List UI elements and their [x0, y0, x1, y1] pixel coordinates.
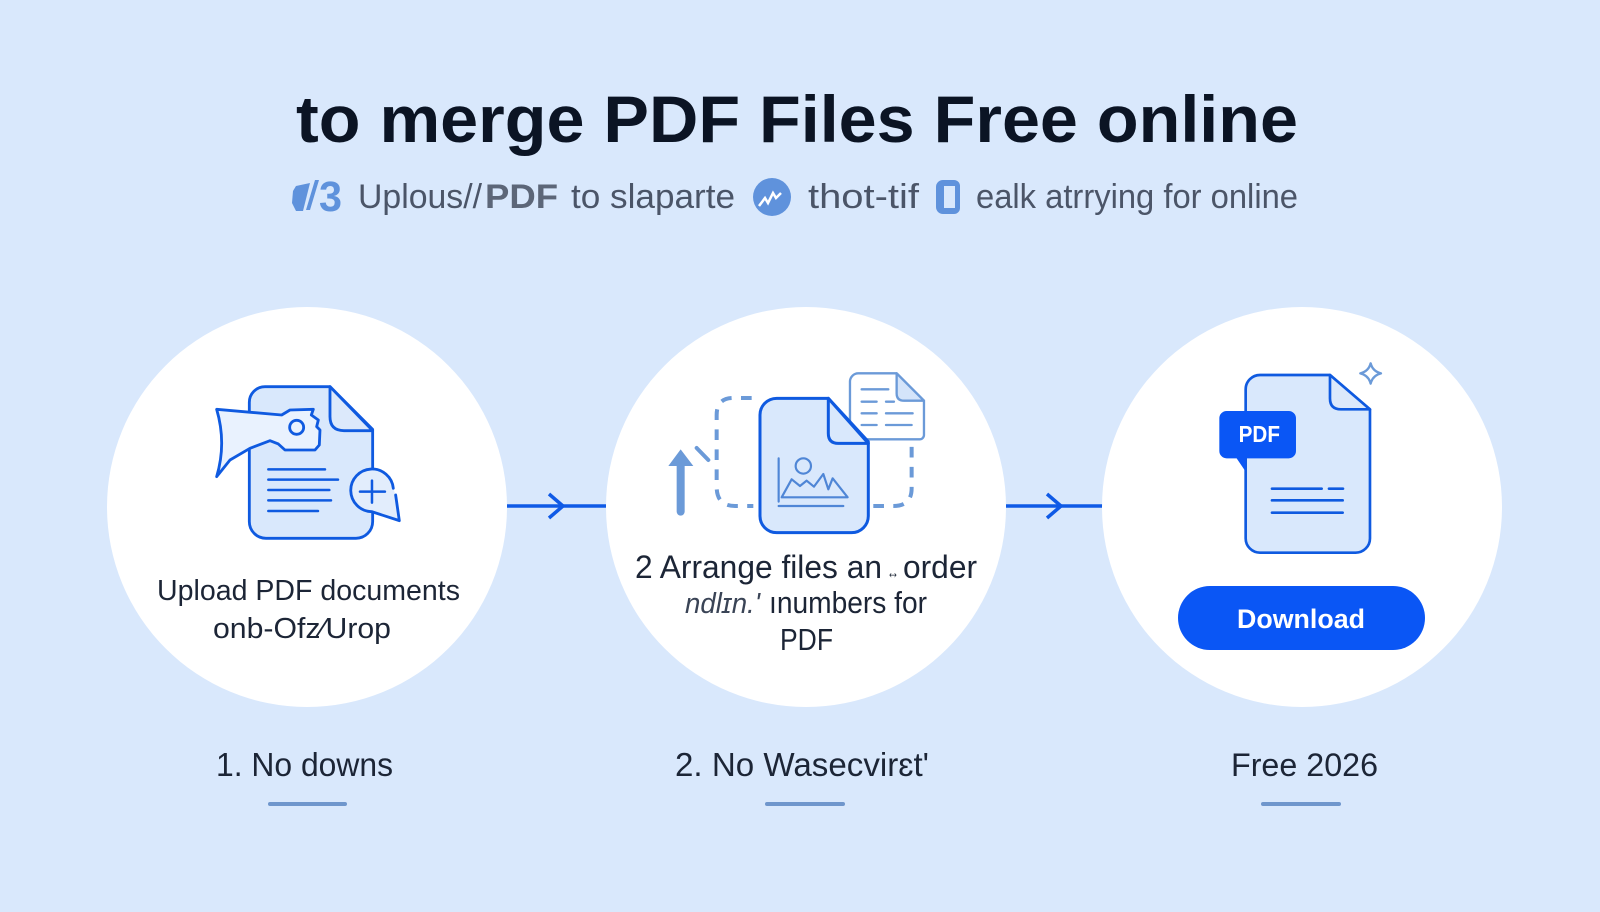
download button: [1178, 586, 1425, 650]
caption 1: [216, 746, 393, 806]
icon: phone: [936, 180, 960, 214]
step 2 description: 2 Arrange files an: [635, 549, 882, 585]
step 1 description: Upload PDF documents: [157, 575, 460, 607]
step 1 description: onb-Ofz⁄Urop: [213, 613, 391, 645]
subtitle row: [292, 173, 1298, 221]
subtitle text: tool: thot-tif: [808, 178, 920, 216]
icon: link circle: [753, 178, 791, 216]
caption 2: [675, 746, 929, 806]
panel: step 3 download: [1102, 307, 1502, 707]
step 2 description: ınumbers for: [769, 585, 927, 620]
step 2 description: order: [903, 549, 977, 585]
download button: Download: [1237, 604, 1365, 634]
icon: PDF document: [1219, 363, 1381, 553]
circle 1: [107, 307, 507, 707]
subtitle text: upload: PDF: [485, 178, 558, 216]
caption 1: 1. No downs: [216, 746, 393, 783]
step 2 description: PDF: [780, 622, 833, 657]
caption 3: [1231, 747, 1378, 806]
caption 2: 2. No Wasecvirɛt': [675, 746, 929, 783]
icon: step count: [292, 173, 342, 221]
subtitle text: upload: to slaparte: [571, 178, 735, 216]
connector arrow 2: [1006, 494, 1103, 518]
icon: sparkle: [1360, 363, 1381, 384]
title: to merge PDF Files Free online: [296, 82, 1298, 156]
circle 3: [1102, 307, 1502, 707]
panel: step 1 upload: [107, 307, 507, 707]
connector arrow 1: [507, 494, 606, 518]
panel: step 2 arrange: [606, 307, 1006, 707]
circle 2: [606, 307, 1006, 707]
caption 3: Free 2026: [1231, 747, 1378, 783]
step 2 description: ndlɪn.': [685, 588, 761, 620]
icon: arranged documents: [668, 373, 924, 533]
subtitle text: online: ealk atrrying for online: [976, 178, 1298, 216]
PDF badge: [1219, 411, 1296, 472]
icon: step count: 3: [319, 173, 342, 221]
subtitle text: upload: Uplous//: [358, 178, 483, 216]
icon: document with hand and plus: [217, 387, 399, 538]
step 2 description: ↔: [887, 562, 899, 582]
PDF badge: PDF: [1239, 421, 1280, 447]
